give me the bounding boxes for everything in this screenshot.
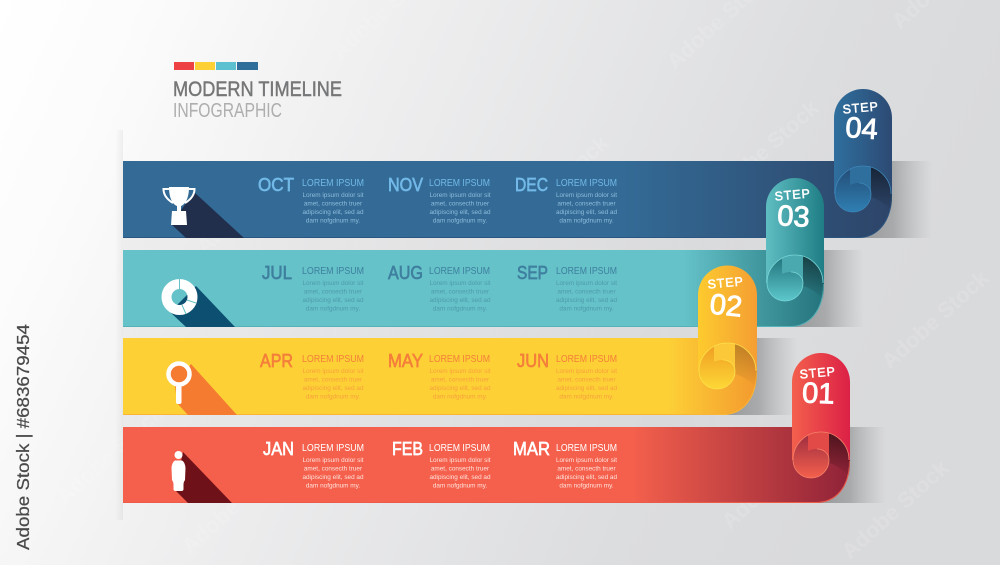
text: Oct Nov Dec: LOREM IPSUM [302,177,364,189]
text: Jul Aug Sep: amet, consecth truer [557,288,616,296]
text: Jan Feb Mar: FEB [392,439,423,459]
text: Apr May Jun: amet, consecth truer [431,376,490,384]
text: Jul Aug Sep: adipiscing elit, sed ad [302,297,364,304]
text: Oct Nov Dec [258,175,617,224]
text: Jan Feb Mar: amet, consecth truer [557,466,616,472]
text: Jul Aug Sep: Lorem ipsum dolor sit [429,280,491,287]
text: Apr May Jun: amet, consecth truer [304,376,363,384]
text: Apr May Jun: adipiscing elit, sed ad [302,385,364,392]
step 04 scroll [834,89,892,212]
step 04 scroll: STEP [842,99,879,117]
text: Jan Feb Mar: LOREM IPSUM [429,442,490,454]
text: Jul Aug Sep: amet, consecth truer [304,288,363,296]
text: Oct Nov Dec: amet, consecth truer [557,200,616,208]
step 02 scroll [698,266,757,389]
text: Jul Aug Sep: dam nofgdnum my. [433,306,487,312]
watermark text: Adobe Stock [877,265,994,374]
text: Jul Aug Sep: adipiscing elit, sed ad [556,297,617,304]
watermark text: Adobe Stock [42,60,159,169]
watermark text: Adobe Stock [52,400,169,509]
step 01 scroll [792,353,850,478]
text: Jul Aug Sep: adipiscing elit, sed ad [429,297,491,304]
text: Jul Aug Sep: LOREM IPSUM [556,265,617,277]
text: Oct Nov Dec: Lorem ipsum dolor sit [429,192,491,199]
text: Apr May Jun: LOREM IPSUM [556,353,617,365]
text: Apr May Jun: adipiscing elit, sed ad [429,385,491,392]
text: Oct Nov Dec: DEC [515,175,548,195]
text: Jan Feb Mar [263,439,617,490]
text: Apr May Jun: APR [260,351,293,371]
text: Oct Nov Dec: Lorem ipsum dolor sit [302,192,364,199]
title [173,78,342,122]
text: Jan Feb Mar: dam nofgdnum my. [306,482,360,490]
text: Oct Nov Dec: dam nofgdnum my. [433,218,487,224]
panel: Q1 red band [123,427,886,503]
step 02 scroll: 02 [708,288,744,324]
text: Oct Nov Dec: Lorem ipsum dolor sit [556,192,617,199]
step 03 scroll: 03 [777,200,810,234]
text: Oct Nov Dec: adipiscing elit, sed ad [556,209,617,216]
icon: magnifier with long shadow [168,364,237,415]
text: Jul Aug Sep: dam nofgdnum my. [306,306,360,312]
text: Jul Aug Sep: LOREM IPSUM [302,265,364,277]
watermark text: Adobe Stock [707,95,824,204]
text: Jul Aug Sep: amet, consecth truer [431,288,490,296]
text: Oct Nov Dec: adipiscing elit, sed ad [429,209,491,216]
vertical stock credit: Adobe Stock | #683679454 [13,324,33,550]
text: Jul Aug Sep: SEP [517,263,548,283]
text: Apr May Jun: dam nofgdnum my. [306,394,360,400]
text: Apr May Jun: LOREM IPSUM [302,353,364,365]
text: Apr May Jun: dam nofgdnum my. [559,394,614,400]
text: Oct Nov Dec: dam nofgdnum my. [559,218,614,224]
text: Jan Feb Mar: Lorem ipsum dolor sit [302,457,364,464]
step 03 scroll: STEP [774,186,811,204]
text: Jul Aug Sep: Lorem ipsum dolor sit [302,280,364,287]
text: Apr May Jun: amet, consecth truer [557,376,616,384]
text: Oct Nov Dec: LOREM IPSUM [429,177,490,189]
watermark text: Adobe Stock [837,455,954,564]
title: INFOGRAPHIC [173,100,282,122]
watermark text: Adobe Stock [717,425,834,534]
text: Apr May Jun [260,351,617,400]
text: Apr May Jun: JUN [517,351,549,371]
text: Jul Aug Sep: JUL [262,263,292,283]
step 03 scroll [766,178,824,301]
text: Jan Feb Mar: dam nofgdnum my. [559,482,614,490]
colour key bars [174,62,258,70]
text: Jul Aug Sep [262,263,617,312]
text: Jan Feb Mar: Lorem ipsum dolor sit [429,457,491,464]
title: MODERN TIMELINE [173,78,342,101]
text: Jan Feb Mar: adipiscing elit, sed ad [556,474,617,481]
text: Jul Aug Sep: LOREM IPSUM [429,265,490,277]
text: Jan Feb Mar: dam nofgdnum my. [433,482,487,490]
step 04 scroll: 04 [844,112,879,146]
text: Jan Feb Mar: JAN [263,439,294,459]
text: Jul Aug Sep: dam nofgdnum my. [559,306,614,312]
text: Jul Aug Sep: AUG [388,263,423,283]
text: Apr May Jun: Lorem ipsum dolor sit [556,368,617,375]
panel: Q3 teal band [123,250,864,327]
panel: Q2 yellow band [123,338,797,415]
watermark text: Adobe Stock [192,150,309,259]
text: Oct Nov Dec: amet, consecth truer [431,200,490,208]
text: Jul Aug Sep: Lorem ipsum dolor sit [556,280,617,287]
text: Jan Feb Mar: MAR [513,439,550,459]
step 01 scroll: 01 [802,377,835,411]
step 02 scroll: STEP [707,274,744,292]
watermark text: Adobe Stock [497,130,614,239]
text: Oct Nov Dec: adipiscing elit, sed ad [302,209,364,216]
icon: donut chart with long shadow [166,279,235,327]
text: Oct Nov Dec: LOREM IPSUM [556,177,617,189]
text: Jan Feb Mar: amet, consecth truer [431,466,490,472]
panel: Q4 blue band [123,161,932,238]
text: Jan Feb Mar: adipiscing elit, sed ad [302,474,364,481]
text: Jan Feb Mar: LOREM IPSUM [556,442,617,454]
text: Jan Feb Mar: amet, consecth truer [304,466,363,472]
text: Jan Feb Mar: Lorem ipsum dolor sit [556,457,617,464]
text: Oct Nov Dec: NOV [388,175,423,195]
step 01 scroll: STEP [799,364,836,382]
text: Jan Feb Mar: LOREM IPSUM [302,442,364,454]
text: Apr May Jun: adipiscing elit, sed ad [556,385,617,392]
watermark text: Adobe Stock [177,450,294,559]
text: Apr May Jun: LOREM IPSUM [429,353,490,365]
text: Oct Nov Dec: amet, consecth truer [304,200,363,208]
text: Apr May Jun: dam nofgdnum my. [433,394,487,400]
icon: person with long shadow [172,451,232,503]
icon: trophy with long shadow [164,187,244,238]
text: Jan Feb Mar: adipiscing elit, sed ad [429,474,491,481]
text: Oct Nov Dec: dam nofgdnum my. [306,218,360,224]
text: Apr May Jun: Lorem ipsum dolor sit [429,368,491,375]
text: Oct Nov Dec: OCT [258,175,294,195]
text: Apr May Jun: MAY [388,351,423,371]
text: Apr May Jun: Lorem ipsum dolor sit [302,368,364,375]
